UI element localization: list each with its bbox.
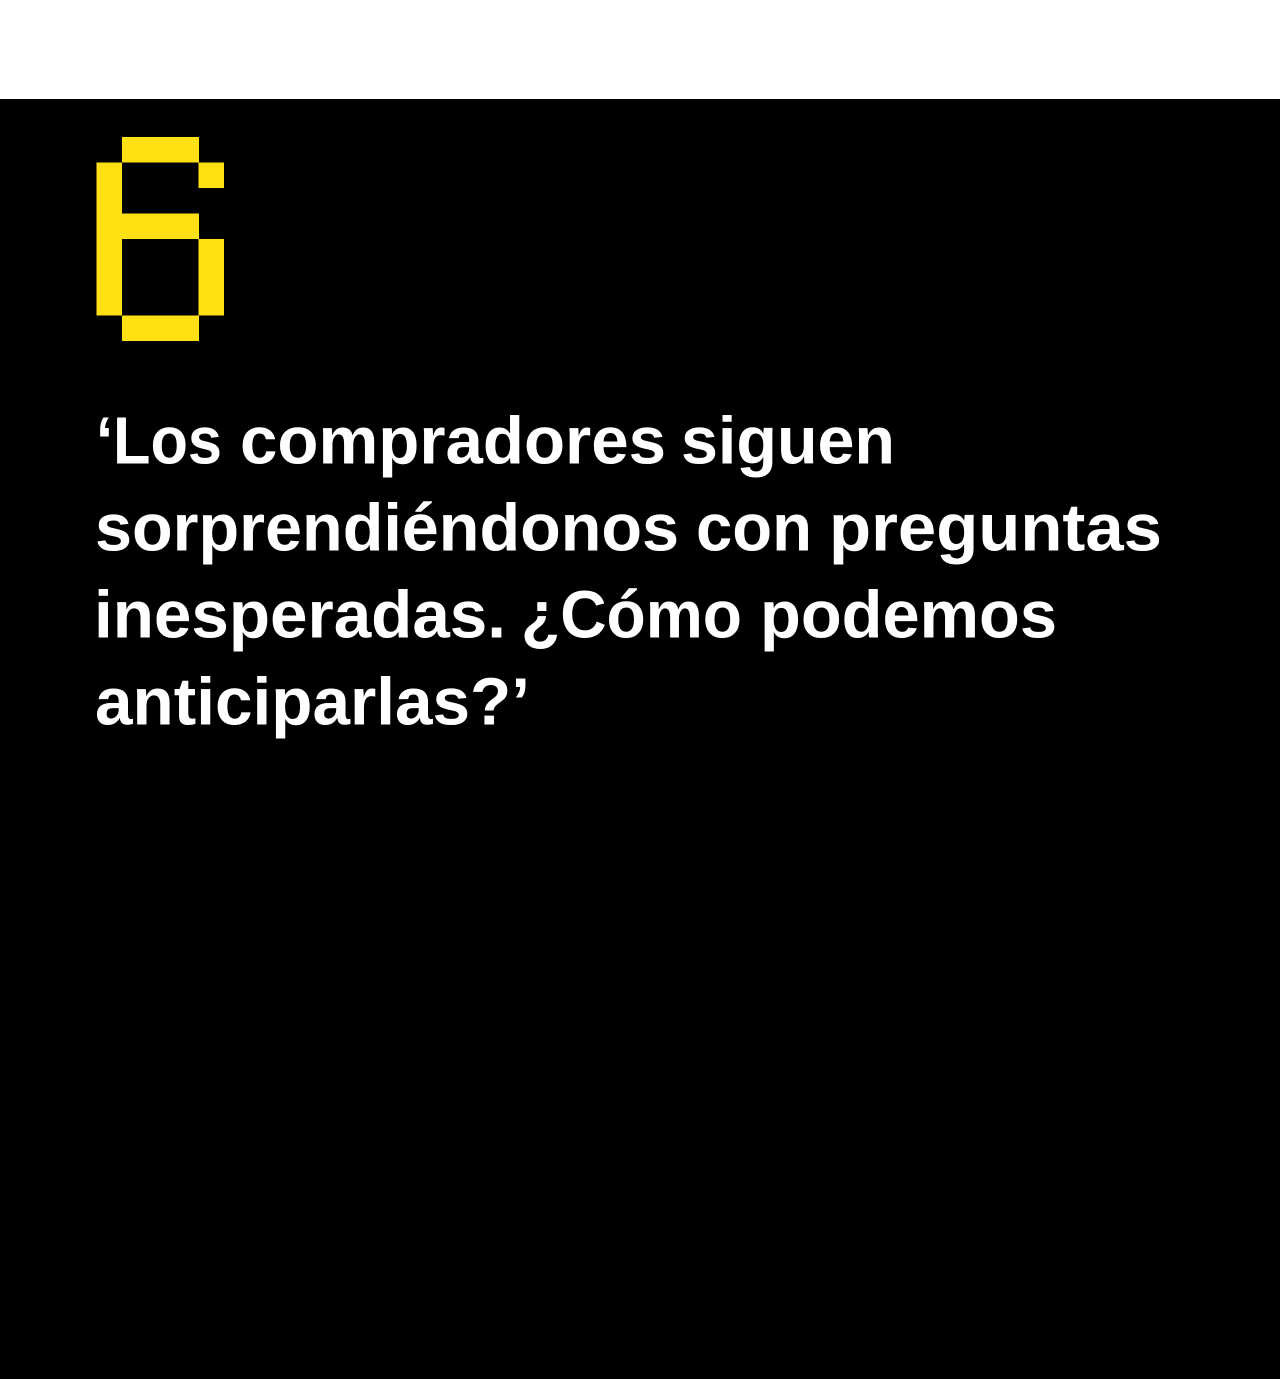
- heading: question text: [94, 404, 1162, 740]
- heading: question text: compradores: [240, 404, 666, 478]
- heading: question text: con: [696, 490, 812, 566]
- heading: question text: ‘Los: [96, 404, 222, 478]
- heading: question text: siguen: [681, 404, 895, 478]
- icon: pixel number 6: [96, 137, 224, 341]
- heading: question text: ¿Cómo: [521, 578, 742, 652]
- heading: question text: preguntas: [829, 490, 1162, 566]
- heading: question text: anticiparlas?’: [95, 664, 530, 740]
- heading: question text: sorprendiéndonos: [95, 490, 679, 566]
- heading: question text: inesperadas.: [94, 578, 506, 652]
- heading: question text: podemos: [760, 578, 1057, 652]
